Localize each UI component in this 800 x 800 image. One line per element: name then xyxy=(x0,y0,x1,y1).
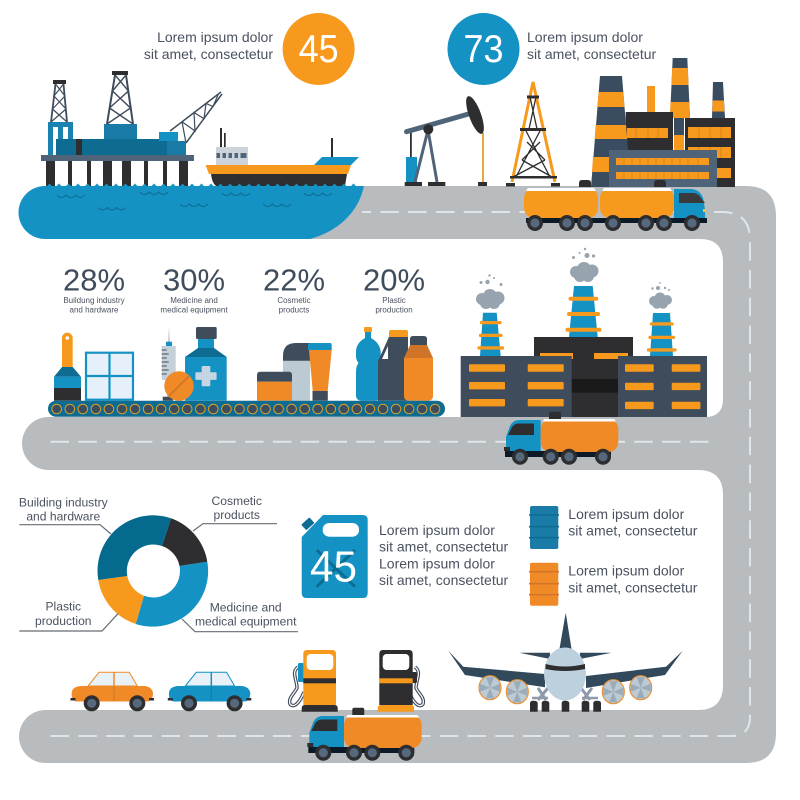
smoke: left xyxy=(476,274,504,309)
conveyor belt xyxy=(48,401,445,417)
stack: left xyxy=(477,313,504,356)
stat: 20% plastic: production xyxy=(375,306,413,315)
tanker truck: top road xyxy=(524,188,707,231)
fuel pump: dark xyxy=(378,650,423,712)
text: blue barrel xyxy=(568,506,698,539)
callout: building industry: and hardware xyxy=(26,510,101,524)
stat: 22% cosmetic: Cosmetic xyxy=(277,296,311,305)
text: orange barrel xyxy=(568,563,698,595)
icon: paint brush xyxy=(54,333,81,401)
oil derrick xyxy=(506,82,560,186)
callout: medicine xyxy=(182,601,298,632)
stat: 28% building industry: Buildung industry xyxy=(63,296,125,305)
fuel pump: orange xyxy=(290,650,338,712)
tanker ship xyxy=(206,128,359,186)
icon: cosmetic tube xyxy=(308,343,332,401)
icon: plastic water bottle xyxy=(356,327,381,401)
callout: cosmetic: products xyxy=(214,508,260,522)
stat: 20% plastic: 20% xyxy=(363,263,425,298)
stack: center xyxy=(566,286,602,337)
stat: 22% cosmetic xyxy=(263,263,325,315)
text: orange barrel: Lorem ipsum dolor xyxy=(568,563,685,579)
stat: 22% cosmetic: 22% xyxy=(263,263,325,298)
airplane xyxy=(448,613,683,712)
stat: 28% building industry: and hardware xyxy=(70,306,119,315)
stack: right xyxy=(647,313,677,356)
smoke: right xyxy=(649,282,672,309)
offshore oil platform xyxy=(41,71,222,186)
tanker truck: bottom road xyxy=(307,708,422,761)
callout: building industry: Building industry xyxy=(19,496,109,510)
callout: plastic xyxy=(19,600,118,631)
icon: cosmetic jar xyxy=(257,372,292,401)
text: blue barrel: sit amet, consectetur xyxy=(568,523,698,539)
stat: 28% building industry: 28% xyxy=(63,263,125,298)
callout: cosmetic xyxy=(193,494,277,531)
icon: window xyxy=(86,353,133,400)
stat: 20% plastic xyxy=(363,263,425,315)
text: top right: Lorem ipsum dolor xyxy=(527,29,643,45)
stat: 30% medicine: Medicine and xyxy=(170,296,218,305)
icon: medicine bottle xyxy=(185,327,227,401)
text: jerrycan: sit amet, consectetur xyxy=(379,539,509,555)
icon: orange barrel xyxy=(529,563,559,606)
circle stat 45: 45 xyxy=(299,28,339,71)
stat: 30% medicine: medical equipment xyxy=(160,306,228,315)
stat: 28% building industry xyxy=(63,263,125,315)
text: jerrycan: Lorem ipsum dolor xyxy=(379,555,495,571)
sea xyxy=(18,186,364,239)
icon: syringe xyxy=(162,327,176,401)
callout: medicine: Medicine and xyxy=(210,601,282,615)
blue car xyxy=(168,672,251,711)
icon: blue barrel xyxy=(529,506,559,549)
smoke: center xyxy=(570,248,598,282)
donut chart xyxy=(98,515,208,627)
stat: 30% medicine: 30% xyxy=(163,263,225,298)
stat: 30% medicine xyxy=(160,263,228,315)
callout: building industry xyxy=(19,496,111,534)
icon: orange plastic bottle xyxy=(404,336,433,401)
callout: cosmetic: Cosmetic xyxy=(211,494,262,508)
refinery xyxy=(579,58,735,187)
circle stat 73 xyxy=(448,13,520,85)
text: jerrycan xyxy=(379,522,509,588)
processing factory xyxy=(461,248,707,417)
icon: cosmetic bottle xyxy=(283,343,310,401)
stat: 20% plastic: Plastic xyxy=(382,296,406,305)
wave crests xyxy=(45,184,360,186)
icon: pill xyxy=(164,371,194,401)
text: top right: sit amet, consectetur xyxy=(527,46,657,62)
callout: plastic: Plastic xyxy=(45,600,81,614)
callout: plastic: production xyxy=(35,614,92,628)
engines xyxy=(479,676,652,704)
text: blue barrel: Lorem ipsum dolor xyxy=(568,506,685,522)
text: top left: sit amet, consectetur xyxy=(144,46,273,62)
text: jerrycan: Lorem ipsum dolor xyxy=(379,522,495,538)
circle stat 45 xyxy=(283,13,355,85)
road xyxy=(19,186,776,763)
tanker truck: middle road xyxy=(504,412,618,465)
icon: jerrycan 45: 45 xyxy=(310,543,357,592)
text: top left: Lorem ipsum dolor xyxy=(157,29,273,45)
orange car xyxy=(70,672,154,711)
circle stat 73: 73 xyxy=(464,28,504,71)
text: orange barrel: sit amet, consectetur xyxy=(568,579,698,595)
stat: 22% cosmetic: products xyxy=(279,306,309,315)
icon: plastic canister xyxy=(378,330,408,401)
icon: jerrycan 45 xyxy=(301,515,368,598)
callout: medicine: medical equipment xyxy=(195,615,297,629)
text: top right xyxy=(527,29,657,62)
text: jerrycan: sit amet, consectetur xyxy=(379,572,509,588)
text: top left xyxy=(144,29,273,62)
oil pump jack xyxy=(405,94,487,186)
